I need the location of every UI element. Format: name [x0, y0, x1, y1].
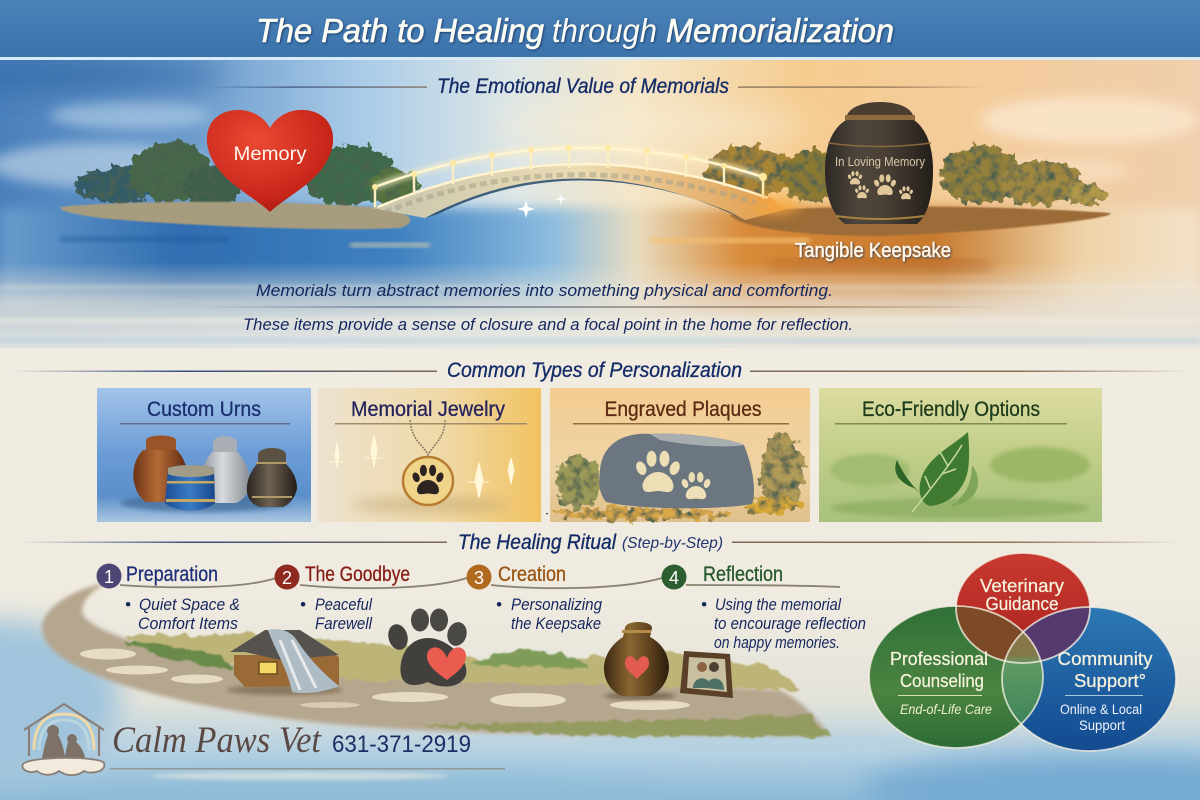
card: engraved plaques: [550, 388, 810, 522]
plants beside rock: [550, 434, 804, 520]
card: memorial jewelry: Memorial Jewelry: [351, 398, 505, 421]
icon: keepsake urn: [825, 102, 933, 224]
heading: healing ritual: [20, 531, 1180, 554]
icon: necklace chain: [410, 420, 445, 455]
card: eco-friendly options: Eco-Friendly Options: [862, 398, 1040, 421]
venn labels: End-of-Life Care: [900, 701, 992, 717]
venn labels: Guidance: [986, 594, 1058, 614]
sky and water backdrop: [0, 58, 1200, 348]
step 1: preparation: Quiet Space &: [139, 595, 240, 614]
venn labels: Counseling: [900, 671, 984, 691]
venn labels: Veterinary: [980, 576, 1064, 596]
bridge: [372, 145, 799, 220]
step 1: preparation: •: [125, 595, 131, 614]
title: Memorialization: [666, 12, 894, 49]
icon: leaf: [895, 432, 978, 512]
icon: paw pendant: [403, 457, 453, 505]
step 1: preparation: Preparation: [126, 563, 218, 586]
step 2: the goodbye: [274, 563, 410, 633]
winding path: [42, 583, 830, 737]
heading: healing ritual: The Healing Ritual: [458, 531, 617, 554]
venn overlaps: [869, 553, 1176, 751]
lower page background: [0, 340, 1200, 800]
venn labels: Community: [1058, 649, 1152, 669]
icon: house with pets: [22, 704, 104, 775]
card: eco-friendly options: [819, 388, 1102, 522]
text: description lines: [200, 281, 1000, 334]
icon: bronze urn with heart: [604, 622, 676, 700]
icon: stone with paws: [599, 434, 754, 508]
step 4: reflection: Using the memorial: [715, 595, 842, 614]
text: description lines: Memorials turn abstract memories into something physical and comforting.: [256, 281, 833, 300]
icon: blue urn: [165, 465, 215, 510]
step 3: creation: [466, 563, 602, 633]
text: description lines: These items provide a sense of closure and a focal point in the home for reflection.: [243, 315, 853, 334]
stepping stones: [80, 648, 690, 710]
logo: calm paws vet: [22, 704, 505, 775]
icon: silver urn: [200, 436, 250, 503]
step 4: reflection: on happy memories.: [714, 633, 840, 652]
water reflections: [60, 236, 990, 270]
title: through: [552, 12, 657, 49]
step 4: reflection: to encourage reflection: [714, 614, 866, 633]
venn labels: Support°: [1074, 671, 1146, 691]
label: tangible keepsake: Tangible Keepsake: [795, 240, 951, 262]
icon: cabin with blanket: [227, 629, 343, 695]
card: memorial jewelry: [318, 388, 541, 522]
heading: personalization: Common Types of Personalization: [447, 359, 742, 382]
step 3: creation: •: [496, 595, 502, 614]
icon: dark urn: [247, 448, 297, 507]
card: engraved plaques: Engraved Plaques: [604, 398, 762, 421]
icon: memory heart: Memory: [234, 144, 307, 165]
step 2: the goodbye: •: [300, 595, 306, 614]
wordmark: Calm Paws Vet: [112, 720, 323, 761]
panel: the healing ritual: [20, 531, 1180, 737]
card: custom urns: [97, 388, 311, 522]
header banner: [0, 0, 1200, 60]
icon: wood urn: [133, 436, 187, 502]
title: [256, 12, 894, 49]
icon: paw stone with heart: [385, 608, 469, 686]
left island: [60, 142, 418, 229]
icon: sparkles: [329, 435, 514, 498]
step 1: preparation: [96, 563, 240, 633]
heading: emotional value: The Emotional Value of Memorials: [437, 75, 729, 98]
step 4: reflection: [662, 563, 866, 652]
step 2: the goodbye: 2: [282, 568, 292, 588]
step 2: the goodbye: The Goodbye: [305, 563, 410, 586]
step connector lines: [120, 578, 840, 588]
step 3: creation: 3: [474, 568, 484, 588]
step 4: reflection: Reflection: [703, 563, 783, 586]
step 2: the goodbye: Farewell: [315, 614, 373, 633]
icon: keepsake urn: In Loving Memory: [835, 155, 926, 169]
venn labels: Support: [1079, 718, 1125, 733]
panel: venn diagram of support: [869, 553, 1176, 751]
title: The Path to Healing: [256, 12, 545, 49]
step 3: creation: Personalizing: [511, 595, 602, 614]
right island: [704, 145, 1111, 236]
venn circle: veterinary guidance: [956, 553, 1090, 663]
venn circle: community support: [1002, 607, 1176, 751]
venn labels: [890, 576, 1152, 733]
venn circle: professional counseling: [869, 606, 1043, 748]
step 2: the goodbye: Peaceful: [315, 595, 373, 614]
step 4: reflection: •: [701, 595, 707, 614]
icon: photo frame: [680, 651, 733, 698]
venn labels: Professional: [890, 649, 988, 669]
venn labels: Online & Local: [1060, 702, 1142, 717]
card: custom urns: Custom Urns: [147, 398, 261, 421]
panel: common types of personalization: [10, 359, 1190, 522]
step 3: creation: Creation: [498, 563, 566, 586]
step 4: reflection: 4: [669, 568, 679, 588]
step 1: preparation: Comfort Items: [138, 614, 238, 633]
background water haze: [0, 620, 1200, 800]
icon: memory heart: [207, 110, 333, 212]
phone number: 631-371-2919: [332, 731, 471, 758]
step 1: preparation: 1: [104, 567, 114, 587]
step 3: creation: the Keepsake: [511, 614, 601, 633]
heading: healing ritual: (Step-by-Step): [622, 535, 723, 552]
panel: emotional value scene: [0, 58, 1200, 348]
